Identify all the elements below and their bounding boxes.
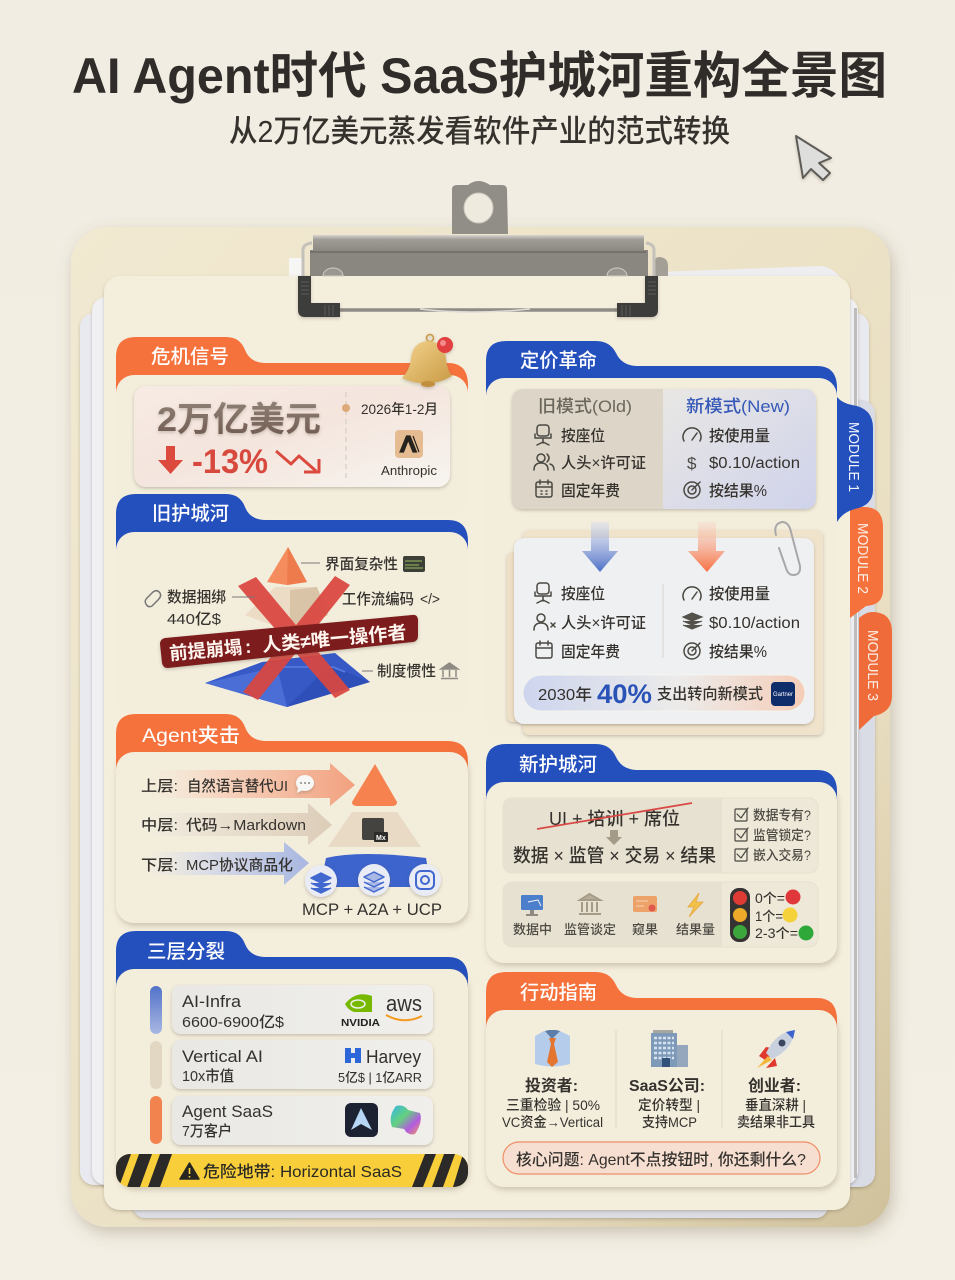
module tab 1: MODULE 1 (845, 422, 862, 492)
traffic light (730, 888, 750, 942)
folder tab: Agent夹击 (116, 714, 468, 780)
module tab 2: MODULE 2 (854, 523, 871, 594)
column: founder: 垂直深耕 | (745, 1097, 806, 1113)
arrow: 上层 (150, 763, 355, 806)
big number: 2万亿美元 (157, 401, 321, 439)
forecast pill: 40% (597, 679, 652, 709)
hazard strip (106, 1154, 475, 1187)
banner (160, 615, 418, 668)
text: 上层 (141, 777, 288, 795)
label: 数据捆绑: 440亿$ (167, 611, 222, 628)
icon: monitor (521, 895, 543, 916)
icon: shirt and tie (535, 1030, 570, 1067)
layered pyramid (320, 764, 431, 887)
company name: Anthropic (381, 463, 438, 478)
banner: 前提崩塌 (168, 636, 243, 664)
core question pill (503, 1142, 820, 1174)
subtitle: 从2万亿美元蒸发看软件产业的范式转换 (229, 114, 730, 149)
date: 2026年1-2月 (361, 401, 438, 417)
score key: 0个= (755, 891, 785, 906)
forecast pill: 2030年 (538, 686, 592, 704)
column: new model: 新模式(New) (686, 397, 790, 416)
arrow: 中层 (150, 803, 332, 845)
label: 数据捆绑 (145, 589, 255, 628)
metal clip (298, 181, 668, 317)
column: SaaS company: 定价转型 | (638, 1097, 700, 1113)
icon: down arrow (158, 446, 183, 474)
percent drop: -13% (192, 443, 268, 481)
protocol icons (305, 864, 441, 897)
panel: Agent夹击 (116, 714, 468, 923)
heading: 三层分裂: 三层分裂 (147, 941, 225, 963)
column: founder: 卖结果非工具 (737, 1114, 815, 1130)
icon row: 数据中 (513, 922, 552, 937)
icon row: 结果量 (676, 922, 715, 937)
icon: Harvey: Harvey (366, 1047, 421, 1067)
text: 上层: 自然语言替代UI (187, 777, 288, 795)
column: founder: 创业者: (748, 1077, 801, 1095)
column: investor: VC资金→Vertical (502, 1114, 603, 1130)
arrow: new to result (688, 522, 725, 572)
result rows: old (534, 583, 646, 661)
tier: Agent SaaS: 7万客户 (182, 1122, 232, 1140)
module tab 1 (837, 397, 873, 522)
icon: Gartner (771, 682, 795, 706)
panel: 行动指南 (486, 972, 837, 1187)
heading: 新护城河: 新护城河 (519, 754, 597, 776)
hazard text: 危险地带: Horizontal SaaS (203, 1163, 402, 1181)
tier: Vertical AI: Vertical AI (182, 1047, 263, 1066)
score key: 1个= (755, 909, 783, 924)
label: 界面复杂性: 界面复杂性 (325, 556, 398, 573)
heading: 危机信号: 危机信号 (151, 346, 229, 368)
text: 下层 (141, 857, 293, 874)
comparison table (512, 389, 816, 509)
stat card (134, 386, 450, 487)
column: old model: 人头×许可证 (561, 454, 646, 472)
column: SaaS company: SaaS公司: (629, 1078, 705, 1095)
column: new model: $0.10/action (709, 455, 800, 472)
label: 数据捆绑: 数据捆绑 (167, 589, 226, 606)
icon: rocket (757, 1030, 795, 1068)
icon: bank (579, 894, 601, 914)
folder tab: 新护城河 (486, 744, 837, 800)
core question pill: 核心问题: Agent不点按钮时, 你还剩什么? (516, 1150, 806, 1169)
heading: 定价革命: 定价革命 (520, 349, 597, 372)
column: founder (737, 1030, 815, 1130)
heading: 行动指南: 行动指南 (520, 982, 597, 1004)
result rows: old: 按座位 (561, 584, 605, 603)
folder tab: 旧护城河 (116, 494, 468, 560)
tier: Vertical AI: 10x市值 (182, 1067, 234, 1085)
heading: 旧护城河: 旧护城河 (152, 503, 229, 525)
column: old model: 旧模式(Old) (538, 397, 632, 416)
forecast pill: 支出转向新模式 (657, 685, 763, 703)
icon: NVIDIA (341, 994, 380, 1029)
checklist: 嵌入交易? (753, 847, 811, 863)
arrow: 下层 (150, 842, 309, 885)
panel: 旧护城河 (116, 494, 468, 712)
column: new model (683, 397, 800, 500)
tier: Agent SaaS (150, 1096, 433, 1145)
icon: falling trend (276, 451, 319, 472)
formula box: 数据 × 监管 × 交易 × 结果 (513, 845, 716, 866)
text: 下层: 下层: (141, 857, 178, 874)
text: 中层 (141, 817, 306, 834)
label: 工作流编码: </> (420, 591, 440, 608)
title: AI Agent时代 SaaS护城河重构全景图 (72, 48, 887, 104)
checklist (735, 808, 811, 863)
text: 中层: 代码→Markdown (186, 817, 306, 834)
column: SaaS company (629, 1030, 705, 1130)
folder tab: 行动指南 (486, 972, 837, 1030)
result rows: new (683, 584, 800, 661)
banner: : (244, 636, 252, 657)
paper stack (80, 258, 875, 1218)
result rows: new: 按结果% (709, 642, 767, 661)
result rows: old: 人头×许可证 (561, 614, 646, 632)
tier: AI-Infra (150, 985, 433, 1034)
icon: NVIDIA: NVIDIA (341, 1018, 380, 1029)
layered pyramid: Mx (376, 835, 386, 842)
column: old model: 按座位 (561, 426, 605, 445)
tier: Vertical AI: 5亿$ | 1亿ARR (338, 1070, 422, 1085)
checklist: 监管锁定? (753, 827, 811, 843)
banner: 人类≠唯一操作者 (261, 621, 407, 656)
tier: Agent SaaS: Agent SaaS (182, 1102, 273, 1121)
score key (755, 890, 814, 941)
panel: 定价革命 (486, 341, 837, 735)
icon: bell (402, 334, 453, 387)
icon: Copilot (391, 1106, 421, 1134)
panel: 危机信号 (116, 334, 468, 515)
folder tab: 三层分裂 (116, 931, 468, 1000)
protocol label: MCP + A2A + UCP (302, 900, 442, 919)
tier: AI-Infra: AI-Infra (182, 992, 242, 1011)
label: 制度惯性 (362, 663, 458, 680)
text: 上层: 上层: (141, 778, 178, 795)
panel: 三层分裂 (106, 931, 475, 1187)
folder tab: 定价革命 (486, 341, 837, 400)
panel: 新护城河 (486, 744, 837, 963)
column: new model: $ (687, 454, 697, 473)
icon: office building (651, 1030, 688, 1067)
pyramid diagram (205, 547, 370, 707)
folder tab: 危机信号 (116, 337, 468, 400)
tier: AI-Infra: 6600-6900亿$ (182, 1014, 285, 1031)
arrow: old to result (582, 522, 618, 572)
checklist: 数据专有? (753, 808, 811, 823)
result rows: old: 固定年费 (561, 642, 620, 661)
icon: bolt (688, 893, 703, 917)
icon: warning (180, 1163, 199, 1179)
label: 界面复杂性 (301, 556, 425, 573)
formula box (503, 798, 818, 873)
icon row (503, 882, 818, 947)
column: old model: 固定年费 (561, 481, 620, 500)
text: 下层: MCP协议商品化 (186, 857, 293, 874)
icon row: 窥果 (632, 922, 658, 937)
note paper stack (507, 522, 823, 735)
label: 工作流编码: 工作流编码 (342, 590, 414, 608)
icon: chat bubble (296, 775, 314, 793)
result rows: new: 按使用量 (709, 584, 770, 603)
icon: card (633, 896, 657, 912)
forecast pill (523, 675, 805, 711)
column: new model: 按使用量 (709, 426, 770, 445)
heading: Agent夹击: Agent夹击 (142, 725, 240, 747)
score key: 2-3个= (755, 926, 798, 941)
column: investor (502, 1030, 603, 1130)
column: new model: 按结果% (709, 481, 767, 500)
module tab 2 (848, 507, 883, 618)
icon: Anthropic logo (395, 430, 423, 458)
module tab 3 (859, 612, 892, 730)
icon: mouse cursor (796, 136, 831, 180)
label: 制度惯性: 制度惯性 (377, 663, 436, 680)
tier: Vertical AI (150, 1040, 433, 1089)
column: investor: 三重检验 | 50% (506, 1097, 600, 1113)
text: 中层: 中层: (141, 817, 178, 834)
icon: paper clip (775, 522, 800, 575)
formula box: UI + 培训 + 席位 (549, 808, 680, 829)
column: old model (534, 397, 646, 500)
clipboard board (71, 227, 890, 1227)
column: SaaS company: 支持MCP (642, 1114, 697, 1130)
icon row: 监管谈定 (564, 922, 616, 937)
icon: aws: aws (386, 991, 422, 1016)
module tab 3: MODULE 3 (864, 630, 881, 701)
icon: agent app (345, 1103, 378, 1137)
red cross (238, 576, 350, 700)
column: investor: 投资者: (525, 1076, 578, 1095)
result rows: new: $0.10/action (709, 615, 800, 632)
icon: Gartner: Gartner (773, 692, 793, 698)
